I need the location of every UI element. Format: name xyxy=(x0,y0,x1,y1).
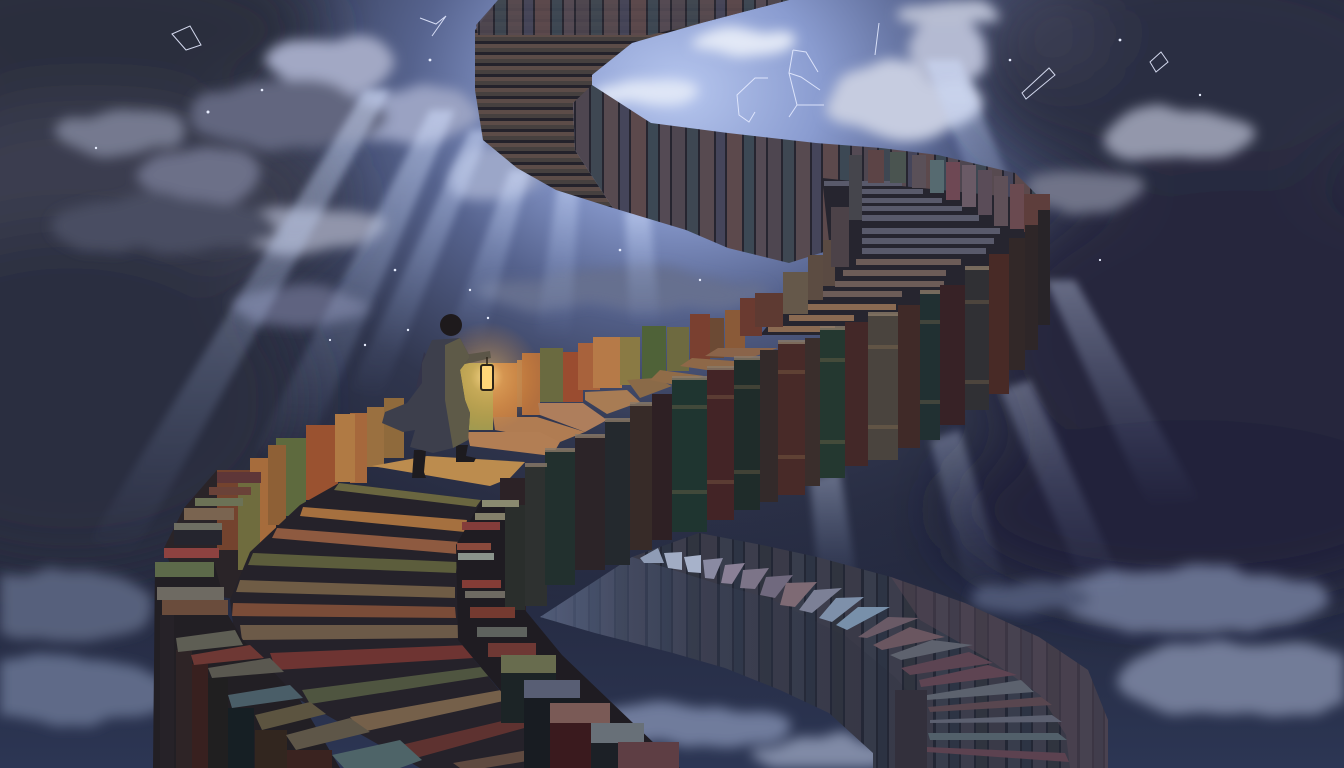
inner edge stack of books xyxy=(456,500,680,768)
lower spiral: outer wall tint xyxy=(891,577,1108,768)
figure: left arm xyxy=(416,352,430,388)
main steps: dark risers xyxy=(230,483,565,768)
pillar book covers xyxy=(155,562,422,768)
upper helix wall of spines xyxy=(573,85,1049,263)
lantern glow xyxy=(432,322,542,432)
upper helix top band of spines xyxy=(476,0,789,35)
inner stack covers xyxy=(457,500,679,768)
upper landing steps xyxy=(760,178,1049,335)
lit tops of the front books xyxy=(525,266,989,467)
lower spiral: book body xyxy=(540,533,1108,768)
main steps xyxy=(230,483,565,768)
spine bands xyxy=(672,300,989,494)
lower faded spiral of books xyxy=(540,533,1108,768)
left ascending books xyxy=(164,414,355,600)
figure: lantern xyxy=(481,357,493,390)
figure: cloak xyxy=(382,338,470,453)
upper helix top coil: layered books xyxy=(475,0,789,208)
figure: right arm xyxy=(463,351,491,364)
left books: dark backing xyxy=(164,470,290,600)
constellations xyxy=(172,16,1168,122)
light rays xyxy=(90,60,1200,600)
figure: legs and boots xyxy=(412,450,426,478)
stars xyxy=(95,39,1201,346)
lower spiral: inner book stack xyxy=(895,690,927,768)
figure: lit side of cloak xyxy=(445,338,470,448)
dark cloud masses xyxy=(0,0,1344,600)
left pillar of stacked books xyxy=(153,562,422,768)
lit upper steps xyxy=(372,348,778,486)
left ascending book covers xyxy=(164,472,261,558)
figure: head and hair xyxy=(440,314,462,336)
back wall of books xyxy=(350,150,1050,483)
front wall of tall books xyxy=(500,210,1050,626)
lower spiral: steps xyxy=(640,548,1069,762)
traveller figure with lantern xyxy=(382,314,493,478)
